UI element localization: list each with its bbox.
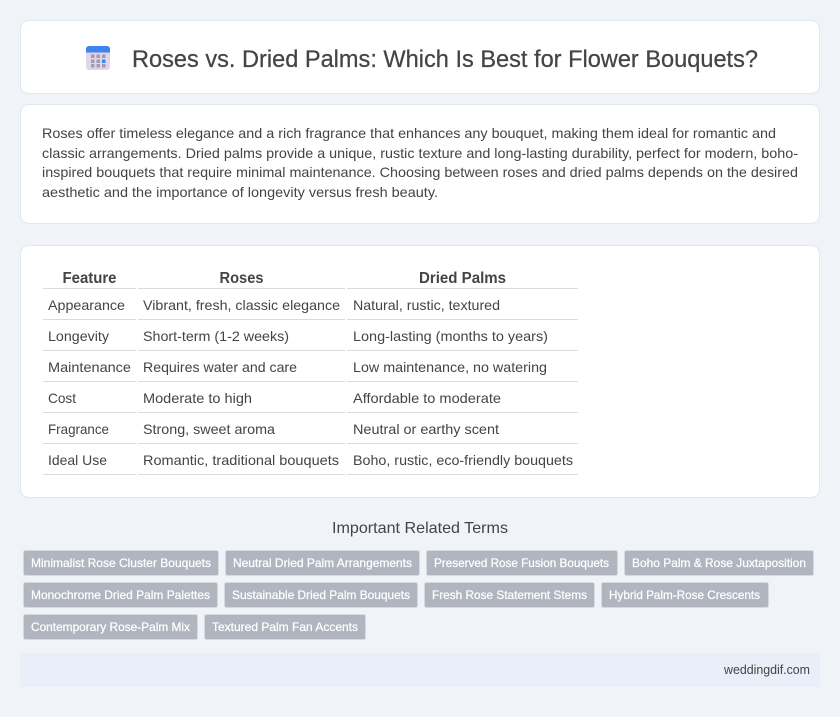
footer: source: weddingdif.com (723, 663, 810, 677)
table row: ideal use (48, 452, 573, 468)
table row: maintenance: Maintenance (48, 359, 131, 375)
tags: related terms: Preserved Rose Fusion Bouquets (434, 556, 609, 570)
panel: header (20, 20, 820, 94)
table header: Feature (62, 270, 117, 287)
table row: longevity (48, 328, 548, 344)
table row: maintenance: Requires water and care (143, 359, 297, 375)
table row: appearance: Vibrant, fresh, classic elegance (143, 297, 340, 313)
table header: Dried Palms (419, 270, 506, 287)
text block: introduction: inspired bouquets that require minimal maintenance. Choosing between roses and dried palms depends on the desired (42, 164, 798, 180)
table row: cost (48, 390, 501, 406)
tags: related terms: Boho Palm & Rose Juxtaposition (632, 556, 806, 570)
tags: related terms: Textured Palm Fan Accents (212, 620, 358, 634)
icon: calendar (86, 46, 110, 70)
text block: introduction: classic arrangements. Dried palms provide a unique, rustic texture and long-lasting durability, perfect for modern, boho- (42, 145, 798, 161)
tags: related terms: Monochrome Dried Palm Palettes (31, 588, 210, 602)
text block: introduction: Roses offer timeless elegance and a rich fragrance that enhances any bouquet, making them ideal for romantic and (42, 125, 776, 141)
table row: maintenance: Low maintenance, no watering (353, 359, 547, 375)
heading: related terms: Important Related Terms (332, 520, 508, 537)
table row: cost: Moderate to high (143, 390, 252, 406)
table row: fragrance: Strong, sweet aroma (143, 421, 275, 437)
table row: fragrance: Neutral or earthy scent (353, 421, 499, 437)
tags: related terms: Contemporary Rose-Palm Mix (31, 620, 190, 634)
panel: comparison table (20, 246, 820, 498)
table row: ideal use: Ideal Use (48, 452, 107, 468)
tags: related terms: Hybrid Palm-Rose Crescents (609, 588, 760, 602)
table row: appearance (48, 297, 500, 313)
table row: ideal use: Romantic, traditional bouquets (143, 452, 339, 468)
tags: related terms: Sustainable Dried Palm Bouquets (232, 588, 410, 602)
table row: maintenance (48, 359, 547, 375)
table row: cost: Affordable to moderate (353, 390, 501, 406)
table row: fragrance: Fragrance (48, 421, 109, 437)
table header (62, 270, 506, 287)
panel: introduction (20, 104, 820, 224)
table row: fragrance (48, 421, 499, 437)
tags: related terms: Minimalist Rose Cluster Bouquets (31, 556, 211, 570)
tags: related terms (24, 550, 814, 640)
table header: Roses (220, 270, 264, 287)
table row: cost: Cost (48, 390, 76, 406)
table row: appearance: Appearance (48, 297, 125, 313)
table row: longevity: Long-lasting (months to years) (353, 328, 548, 344)
tags: related terms: Fresh Rose Statement Stems (432, 588, 587, 602)
table row: longevity: Short-term (1-2 weeks) (143, 328, 289, 344)
table row: longevity: Longevity (48, 328, 109, 344)
title: Roses vs. Dried Palms: Which Is Best for Flower Bouquets? (132, 46, 758, 73)
text block: introduction: aesthetic and the importance of longevity versus fresh beauty. (42, 184, 438, 200)
footer (20, 653, 820, 687)
table row: appearance: Natural, rustic, textured (353, 297, 500, 313)
table row: ideal use: Boho, rustic, eco-friendly bouquets (353, 452, 573, 468)
tags: related terms: Neutral Dried Palm Arrangements (233, 556, 412, 570)
